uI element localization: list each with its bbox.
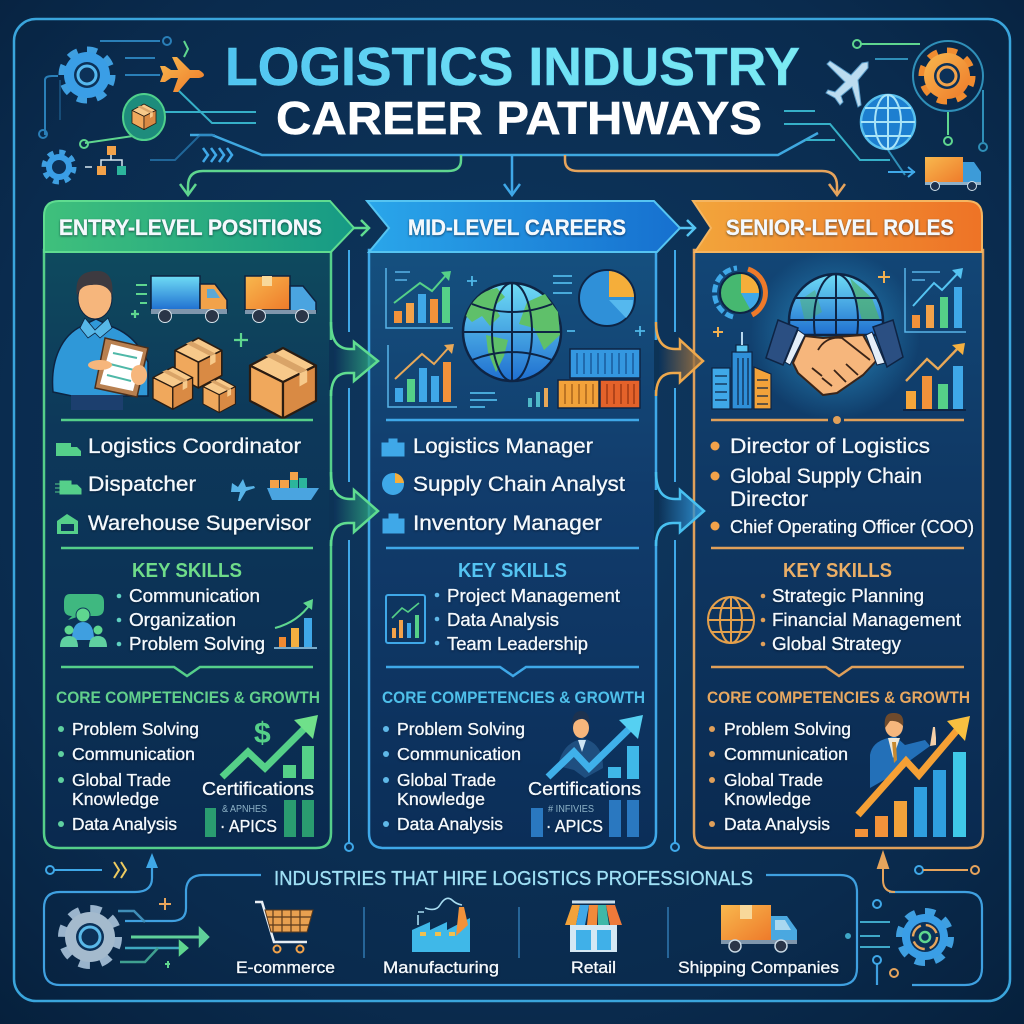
chart: lower bbox=[903, 343, 966, 410]
header connector arrow bbox=[354, 220, 369, 236]
header: entry-level bbox=[44, 201, 354, 252]
job list: Inventory Manager bbox=[413, 512, 602, 535]
icon: decorative marks bbox=[467, 276, 645, 407]
icon: gear orange bbox=[922, 51, 972, 101]
divider: vertical connectors between panels bbox=[345, 250, 679, 851]
panel body bbox=[694, 250, 983, 848]
icon: gear silver left bbox=[62, 909, 118, 965]
certifications: Certifications bbox=[528, 779, 641, 799]
job list: Supply Chain Analyst bbox=[413, 473, 625, 496]
skills list: Strategic Planning bbox=[772, 585, 924, 606]
divider bbox=[61, 419, 313, 421]
certifications bbox=[202, 779, 314, 836]
arrow: up to entry panel bbox=[146, 853, 158, 868]
header: mid-level bbox=[367, 201, 680, 252]
job list: Dispatcher bbox=[88, 473, 196, 496]
divider bbox=[386, 419, 639, 421]
growth chart: $ bbox=[254, 717, 271, 750]
heading: core competencies: CORE COMPETENCIES & GROWTH bbox=[707, 688, 970, 707]
divider bbox=[61, 547, 313, 549]
certifications: · APICS bbox=[220, 816, 277, 836]
icon: globe top-right bbox=[861, 95, 915, 149]
icon: truck orange bbox=[245, 276, 316, 322]
heading: INDUSTRIES THAT HIRE LOGISTICS PROFESSIONALS bbox=[274, 868, 753, 890]
divider with chevron bbox=[711, 667, 964, 676]
heading: MID-LEVEL CAREERS bbox=[408, 215, 626, 240]
growth chart with executive bbox=[855, 713, 970, 837]
divider with chevron bbox=[386, 667, 639, 676]
icon: gear blue right bbox=[900, 912, 950, 962]
competencies list: Global Trade bbox=[724, 770, 823, 790]
competencies list: Problem Solving bbox=[724, 719, 851, 739]
skills list bbox=[435, 585, 620, 654]
icon: gauge pie bbox=[715, 268, 765, 317]
skills list: Organization bbox=[129, 609, 236, 630]
heading: key skills: KEY SKILLS bbox=[458, 560, 567, 582]
industry labels: Shipping Companies bbox=[678, 958, 839, 977]
divider bbox=[364, 907, 668, 958]
competencies list bbox=[58, 719, 199, 834]
icon: sparkle marks bbox=[713, 271, 890, 337]
job list: Logistics Coordinator bbox=[88, 435, 301, 458]
chart: upper line and bars bbox=[386, 268, 453, 328]
competencies list: Data Analysis bbox=[724, 814, 830, 834]
heading: ENTRY-LEVEL POSITIONS bbox=[59, 215, 322, 240]
competencies list: Knowledge bbox=[72, 789, 159, 809]
job list: Logistics Manager bbox=[413, 435, 593, 458]
title: CAREER PATHWAYS bbox=[276, 92, 762, 144]
arrow: entry to mid lower bbox=[329, 472, 378, 546]
skills list bbox=[761, 585, 961, 654]
icon: shipping truck bbox=[721, 905, 797, 952]
competencies list: Knowledge bbox=[397, 789, 485, 809]
left header circuit decoration bbox=[39, 37, 256, 160]
competencies list: Global Trade bbox=[72, 770, 171, 790]
icon: divider diamond bbox=[833, 416, 841, 424]
skills list: Problem Solving bbox=[129, 633, 265, 654]
icon: cart bbox=[255, 902, 313, 952]
industry labels: E-commerce bbox=[236, 958, 335, 977]
icon: tiny bars bbox=[528, 388, 548, 407]
divider bbox=[386, 547, 639, 549]
icon: cargo ship bbox=[267, 472, 319, 500]
decorative nodes bbox=[46, 862, 979, 977]
panel: entry-level bbox=[44, 201, 369, 848]
skills list: Team Leadership bbox=[447, 633, 588, 654]
icon: pie chart bbox=[579, 270, 635, 326]
growth chart with manager bbox=[531, 711, 643, 837]
heading: core competencies: CORE COMPETENCIES & GROWTH bbox=[56, 688, 320, 707]
right header circuit decoration bbox=[784, 40, 987, 177]
connectors to right gear bbox=[846, 922, 890, 947]
job list: Director bbox=[730, 488, 808, 511]
competencies list: Data Analysis bbox=[72, 814, 177, 834]
panel: senior-level bbox=[693, 201, 983, 848]
glow behind handshake bbox=[750, 250, 920, 420]
icon: org chart bbox=[85, 146, 126, 175]
icon: gear blue top-left bbox=[62, 50, 112, 100]
competencies list: Communication bbox=[397, 744, 521, 764]
icon: chevrons bbox=[203, 148, 232, 162]
certifications bbox=[528, 779, 641, 836]
competencies list: Data Analysis bbox=[397, 814, 503, 834]
heading: core competencies: CORE COMPETENCIES & GROWTH bbox=[382, 688, 645, 707]
arrows from gear bbox=[118, 911, 208, 962]
chart: upper bbox=[905, 268, 966, 332]
heading: key skills: KEY SKILLS bbox=[783, 560, 892, 582]
icon: small plane bbox=[231, 479, 255, 501]
competencies list: Problem Solving bbox=[397, 719, 525, 739]
arrow: entry to mid upper bbox=[329, 322, 378, 396]
panel body bbox=[369, 250, 656, 848]
competencies list: Communication bbox=[724, 744, 848, 764]
icon: store bbox=[565, 902, 622, 952]
skills list: Financial Management bbox=[772, 609, 961, 630]
icon: gold globe bbox=[708, 597, 754, 643]
industry labels: Retail bbox=[571, 958, 616, 977]
arrow: to entry-level bbox=[180, 155, 461, 195]
industry labels: Manufacturing bbox=[383, 958, 499, 977]
job list bbox=[382, 435, 625, 535]
title bbox=[225, 37, 800, 144]
icon: small gear bbox=[44, 152, 74, 182]
divider with gap bbox=[711, 419, 964, 421]
certifications: · APICS bbox=[546, 816, 603, 836]
header: senior-level bbox=[693, 201, 982, 252]
section: industries bbox=[44, 853, 982, 985]
icon: shipping containers bbox=[558, 349, 640, 408]
job list: Warehouse Supervisor bbox=[88, 512, 311, 535]
icon: plane light bbox=[826, 61, 868, 107]
competencies list bbox=[709, 719, 851, 834]
icon: globe bbox=[789, 274, 883, 368]
title underline circuit bbox=[190, 133, 818, 155]
icon: stacked boxes bbox=[153, 338, 316, 418]
arrow: up to senior panel bbox=[878, 853, 895, 892]
icon: team chat bbox=[60, 594, 107, 647]
icon: plane orange bbox=[160, 57, 204, 92]
skills list: Global Strategy bbox=[772, 633, 902, 654]
header connector arrow bbox=[680, 220, 695, 236]
arrow: to senior-level bbox=[565, 155, 845, 195]
job list: Chief Operating Officer (COO) bbox=[730, 517, 974, 537]
chart: lower line and bars bbox=[388, 344, 457, 407]
skills list bbox=[117, 585, 265, 654]
competencies list: Global Trade bbox=[397, 770, 496, 790]
icon: globe bbox=[463, 283, 561, 381]
job list: Global Supply Chain bbox=[730, 465, 922, 488]
panel: mid-level bbox=[367, 201, 695, 848]
arrow: to mid-level bbox=[504, 155, 520, 195]
competencies list bbox=[383, 719, 525, 834]
certifications: & APNHES bbox=[222, 804, 267, 815]
icon: chart in frame bbox=[386, 595, 425, 643]
competencies list: Communication bbox=[72, 744, 195, 764]
icon: factory bbox=[412, 898, 470, 952]
job list bbox=[55, 435, 311, 535]
job list: Director of Logistics bbox=[730, 435, 930, 458]
skills list: Communication bbox=[129, 585, 260, 606]
skills list: Project Management bbox=[447, 585, 620, 606]
divider with chevron bbox=[61, 667, 313, 676]
certifications: # INFIVIES bbox=[548, 804, 594, 815]
heading: SENIOR-LEVEL ROLES bbox=[726, 215, 954, 240]
title: LOGISTICS INDUSTRY bbox=[225, 37, 800, 97]
icon: truck top-right bbox=[925, 157, 981, 190]
icon: handshake bbox=[766, 320, 903, 395]
skills list: Data Analysis bbox=[447, 609, 559, 630]
growth chart bbox=[205, 715, 318, 837]
illustration: worker with clipboard bbox=[53, 271, 148, 410]
competencies list: Problem Solving bbox=[72, 719, 199, 739]
divider bbox=[711, 547, 964, 549]
competencies list: Knowledge bbox=[724, 789, 811, 809]
job list bbox=[710, 435, 974, 537]
heading: key skills: KEY SKILLS bbox=[132, 560, 242, 582]
arrow: mid to senior lower bbox=[654, 472, 704, 546]
certifications: Certifications bbox=[202, 779, 314, 799]
industry labels bbox=[236, 958, 839, 977]
icon: small bar chart bbox=[274, 599, 317, 648]
panel body bbox=[44, 250, 331, 848]
icon: truck blue bbox=[136, 276, 227, 322]
arrow: mid to senior upper bbox=[654, 322, 703, 396]
icon: box in circle bbox=[123, 94, 165, 140]
icon: buildings bbox=[712, 332, 771, 409]
icon: plus signs bbox=[131, 310, 248, 347]
frame lines bbox=[44, 860, 982, 985]
